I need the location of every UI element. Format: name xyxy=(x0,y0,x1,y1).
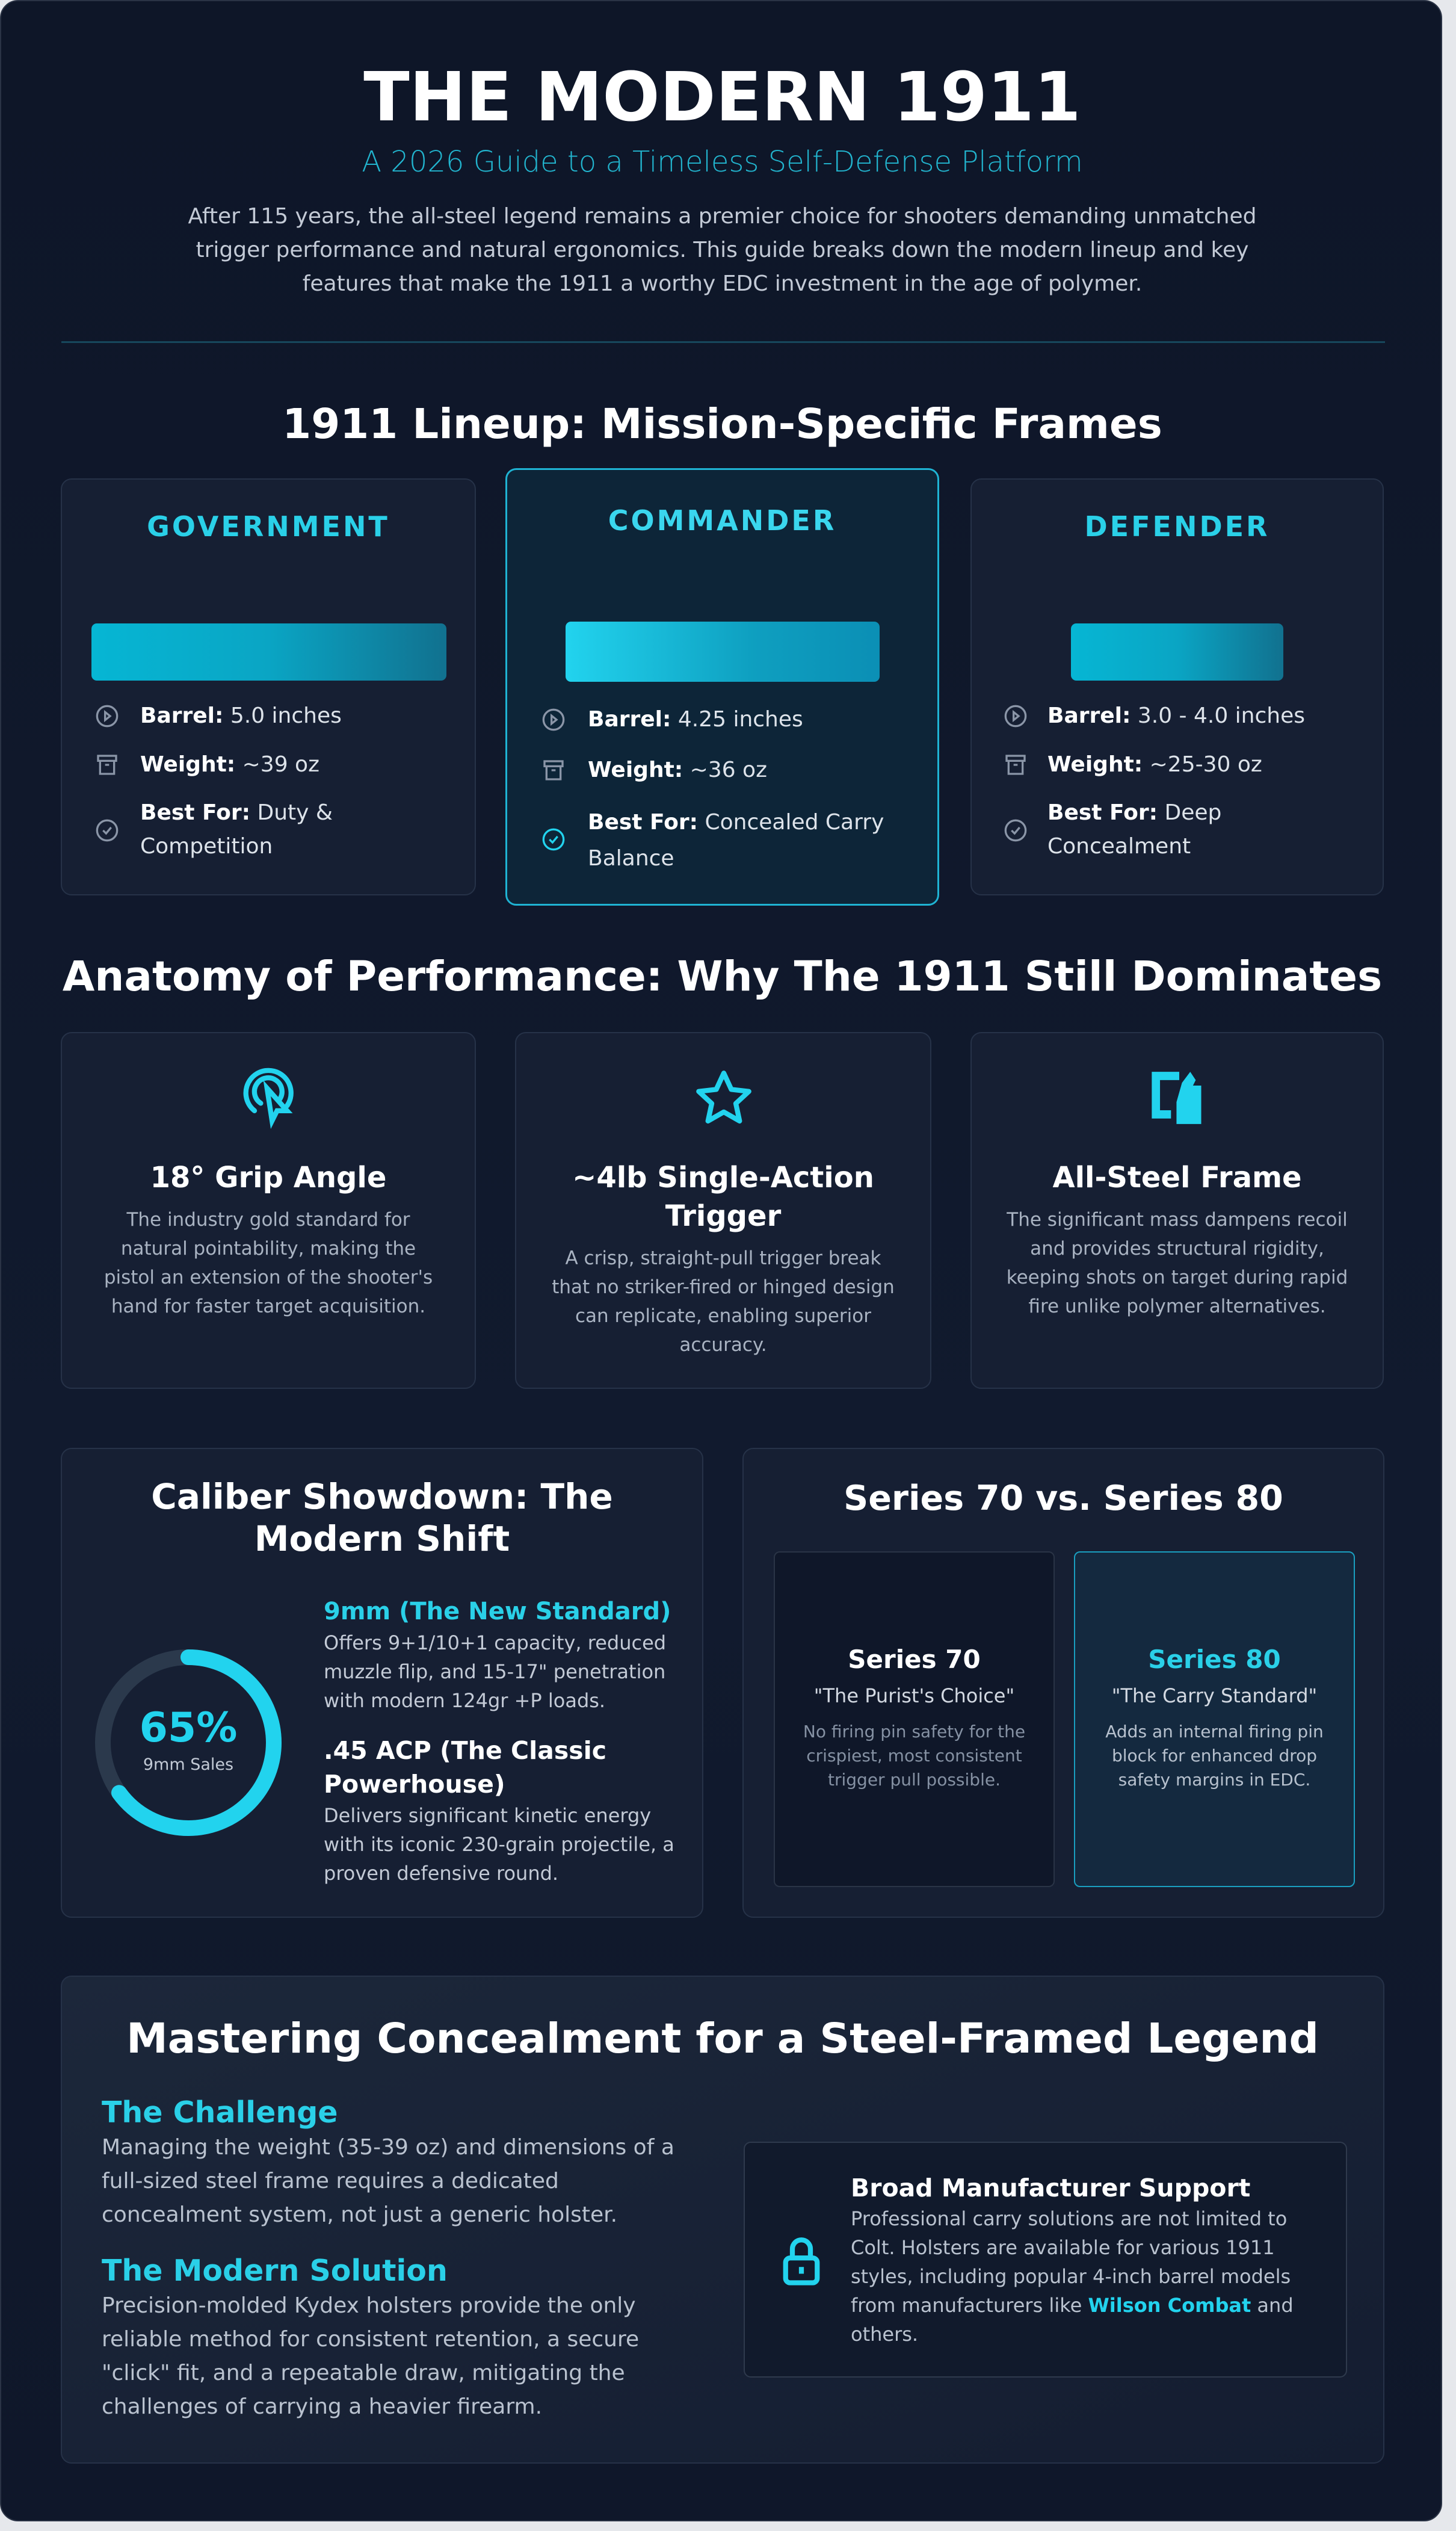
panel: commander: COMMANDER xyxy=(608,504,836,537)
series 70 xyxy=(774,1551,1055,1887)
heading: lineup: 1911 Lineup: Mission-Specific Frames xyxy=(282,400,1162,448)
callout: manufacturer support xyxy=(744,2142,1347,2378)
panel: government xyxy=(61,478,476,895)
panel: defender: Weight: ~25-30 oz xyxy=(1047,752,1262,777)
panel: commander: Barrel: 4.25 inches xyxy=(588,707,803,732)
donut chart: 65% xyxy=(140,1704,237,1752)
text: solution: Precision-molded Kydex holsters provide the only reliable method for consistent retention, a secure "click" fit, and a repeatable draw, mitigating the challenges of carrying a heavier firearm. xyxy=(102,2293,639,2419)
panel: caliber xyxy=(61,1448,703,1918)
panel: trigger: A crisp, straight-pull trigger break xyxy=(565,1247,881,1269)
series 80: Adds an internal firing pin block for enhanced drop safety margins in EDC. xyxy=(1105,1722,1324,1790)
icon: lock xyxy=(783,2237,819,2285)
series 70: Series 70 xyxy=(848,1645,981,1674)
series 80 xyxy=(1074,1551,1355,1887)
panel: grip angle: hand for faster target acquisition. xyxy=(111,1296,425,1317)
panel: caliber: Caliber Showdown: The xyxy=(151,1476,613,1517)
panel: defender: Barrel: 3.0 - 4.0 inches xyxy=(1047,703,1305,728)
panel: defender xyxy=(970,478,1384,895)
panel: steel frame: keeping shots on target during rapid xyxy=(1007,1267,1348,1288)
series 70: "The Purist's Choice" xyxy=(814,1684,1014,1707)
panel: trigger xyxy=(515,1032,931,1389)
panel: series xyxy=(742,1448,1384,1918)
panel: steel frame: fire unlike polymer alternatives. xyxy=(1028,1296,1326,1317)
panel: steel frame: All-Steel Frame xyxy=(1052,1161,1302,1194)
panel: concealment: Mastering Concealment for a Steel-Framed Legend xyxy=(126,2015,1319,2063)
panel: grip angle: natural pointability, making the xyxy=(121,1238,416,1259)
panel: steel frame: and provides structural rigidity, xyxy=(1030,1238,1324,1259)
text: 45 ACP xyxy=(324,1736,674,1885)
text: challenge: Managing the weight (35-39 oz) and dimensions of a full-sized steel frame requires a dedicated concealment system, not just a generic holster. xyxy=(102,2135,674,2227)
subtitle: A 2026 Guide to a Timeless Self-Defense Platform xyxy=(362,145,1083,179)
panel: series: Series 70 vs. Series 80 xyxy=(844,1479,1283,1518)
series 80: Series 80 xyxy=(1148,1645,1281,1674)
callout: manufacturer support: Professional carry solutions are not limited to Colt. Holsters are available for various 1911 styles, including popular 4-inch barrel models from manufacturers like Wilson Combat and others. xyxy=(851,2207,1294,2346)
panel: government: GOVERNMENT xyxy=(147,510,390,543)
series 70: No firing pin safety for the crispiest, most consistent trigger pull possible. xyxy=(803,1722,1025,1790)
text: challenge xyxy=(102,2095,674,2227)
series 80: "The Carry Standard" xyxy=(1112,1684,1317,1707)
icon: pointer xyxy=(243,1068,294,1129)
callout: manufacturer support: Broad Manufacturer Support xyxy=(851,2174,1250,2202)
donut chart xyxy=(95,1649,282,1836)
panel: steel frame: The significant mass dampens recoil xyxy=(1007,1209,1348,1231)
panel: government: Barrel: 5.0 inches xyxy=(140,703,342,728)
title: THE MODERN 1911 xyxy=(363,58,1081,137)
panel: grip angle: pistol an extension of the shooter's xyxy=(104,1267,433,1288)
panel: grip angle xyxy=(61,1032,476,1389)
panel: government: Weight: ~39 oz xyxy=(140,752,319,777)
panel: grip angle: 18° Grip Angle xyxy=(150,1161,386,1194)
panel: defender: DEFENDER xyxy=(1084,510,1269,543)
panel: trigger: ~4lb Single-Action Trigger xyxy=(572,1161,874,1233)
panel: commander: Weight: ~36 oz xyxy=(588,758,767,782)
icon: frame xyxy=(1152,1072,1201,1124)
panel: trigger: can replicate, enabling superior xyxy=(575,1305,871,1327)
panel: grip angle: The industry gold standard for xyxy=(126,1209,410,1231)
text: 9mm xyxy=(324,1598,671,1712)
panel: defender: Best For: Deep Concealment xyxy=(1047,800,1221,859)
panel: commander: Best For: Concealed Carry Balance xyxy=(588,810,884,871)
panel: trigger: that no striker-fired or hinged design xyxy=(552,1276,895,1298)
donut chart: 9mm Sales xyxy=(143,1755,233,1774)
icon: star xyxy=(696,1071,751,1124)
panel: commander xyxy=(505,468,939,906)
panel: caliber: Modern Shift xyxy=(254,1518,510,1559)
heading: anatomy: Anatomy of Performance: Why The 1911 Still Dominates xyxy=(63,953,1382,1001)
text: solution: The Modern Solution xyxy=(102,2254,448,2288)
panel: trigger: accuracy. xyxy=(679,1334,767,1356)
panel: government: Best For: Duty & Competition xyxy=(140,800,333,859)
text: 9mm: 9mm (The New Standard) xyxy=(324,1598,671,1625)
text: challenge: The Challenge xyxy=(102,2095,338,2130)
intro paragraph: After 115 years, the all-steel legend remains a premier choice for shooters demanding unmatched trigger performance and natural ergonomics. This guide breaks down the modern lineup and key features that make the 1911 a worthy EDC investment in the age of polymer. xyxy=(188,204,1256,296)
panel: steel frame xyxy=(970,1032,1384,1389)
text: 45 ACP: Delivers significant kinetic energy with its iconic 230-grain projectile, a proven defensive round. xyxy=(324,1804,674,1885)
panel: concealment xyxy=(61,1976,1384,2464)
text: 45 ACP: .45 ACP (The Classic Powerhouse) xyxy=(324,1736,606,1799)
text: 9mm: Offers 9+1/10+1 capacity, reduced muzzle flip, and 15-17" penetration with modern 124gr +P loads. xyxy=(324,1631,666,1712)
